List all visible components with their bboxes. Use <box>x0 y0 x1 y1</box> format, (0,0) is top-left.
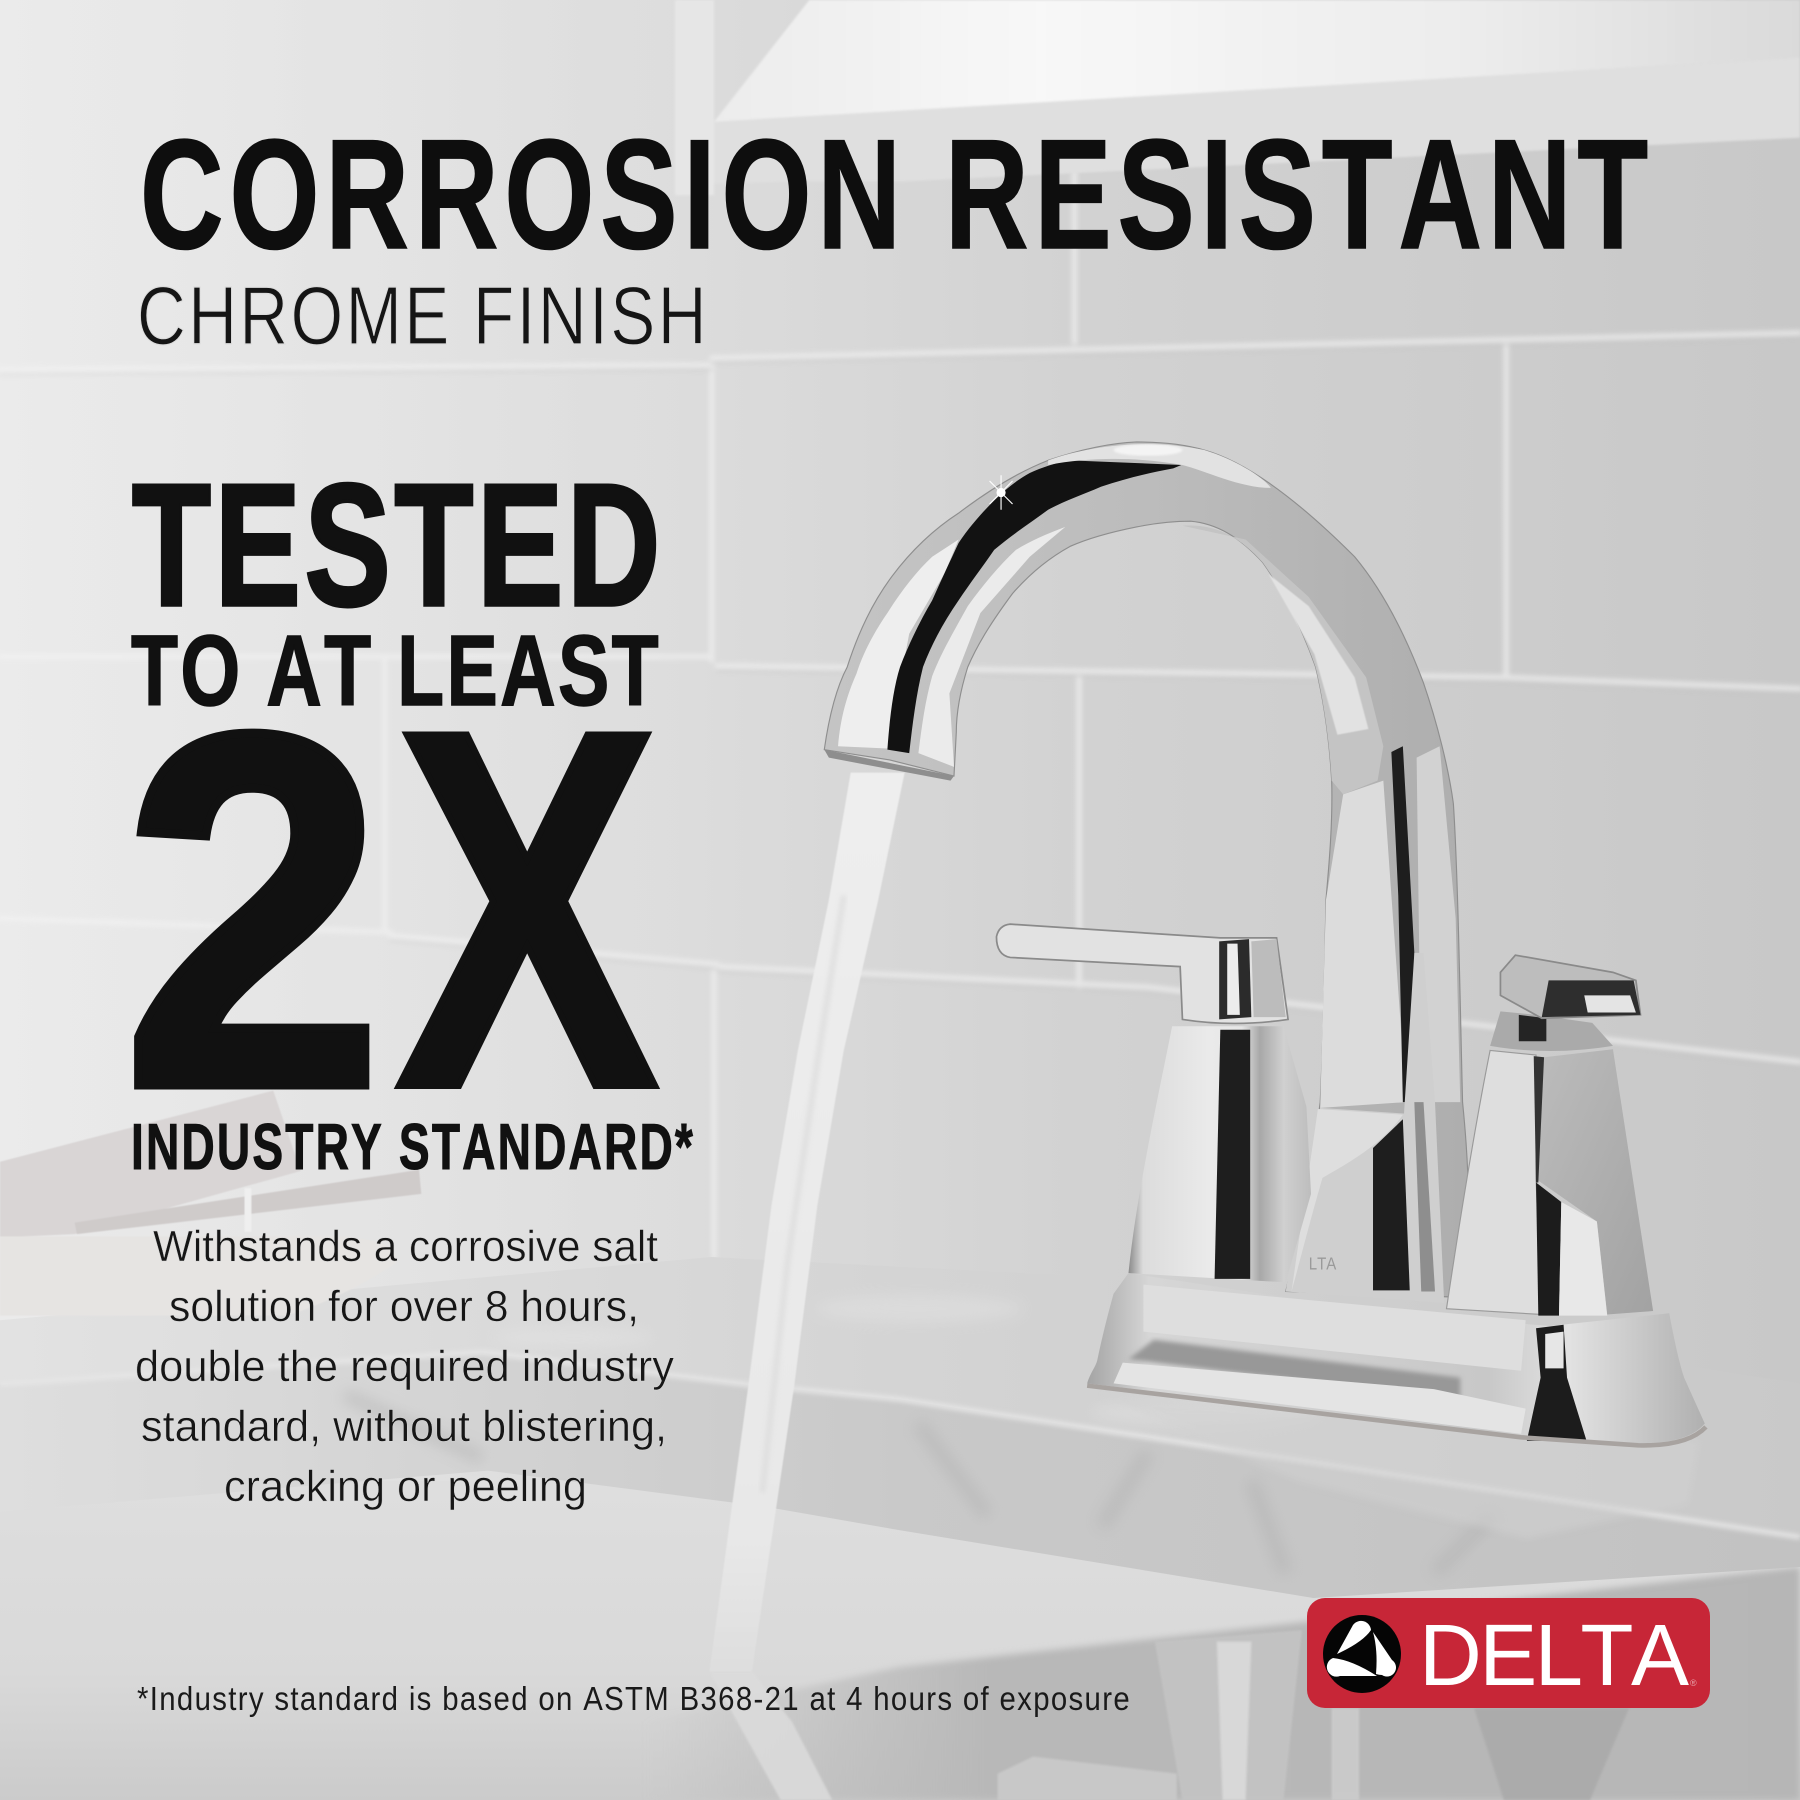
faucet reflection on counter <box>1102 1395 1699 1538</box>
spout base column <box>1286 953 1444 1303</box>
body copy: double the required industry <box>135 1342 674 1391</box>
2X: X: X <box>396 625 660 1193</box>
deck plate <box>1087 1273 1706 1445</box>
left cross handle <box>996 924 1311 1282</box>
faucet <box>824 442 1706 1445</box>
tested: TESTED <box>132 447 664 642</box>
logo: Delta <box>1307 1598 1710 1708</box>
icon: Delta triangle mark <box>1323 1615 1401 1693</box>
logo: Delta: ® <box>1690 1678 1697 1688</box>
claim block: tested to at least 2X industry standard <box>122 447 695 1193</box>
body copy <box>135 1222 674 1511</box>
sink basin <box>0 1481 1800 1800</box>
spout base column: LTA <box>1309 1254 1337 1274</box>
marble countertop <box>0 1257 1800 1598</box>
2X: two: 2 <box>122 629 384 1192</box>
body copy: cracking or peeling <box>224 1462 587 1511</box>
industry standard: INDUSTRY STANDARD* <box>131 1110 695 1183</box>
spout <box>824 442 1468 1297</box>
to at least: TO AT LEAST <box>131 615 661 727</box>
body copy: standard, without blistering, <box>141 1402 667 1451</box>
body copy: Withstands a corrosive salt <box>153 1222 658 1271</box>
ceiling ledge <box>675 0 1800 195</box>
body copy: solution for over 8 hours, <box>169 1282 639 1331</box>
wordmark: DELTA <box>1419 1607 1689 1704</box>
subheading: chrome finish: CHROME FINISH <box>137 269 709 362</box>
footnote: *Industry standard is based on ASTM B368-21 at 4 hours of exposure <box>137 1680 1131 1717</box>
faucet reflection in basin <box>998 1630 1629 1800</box>
water stream <box>709 773 905 1800</box>
right cross handle <box>1446 955 1653 1316</box>
soap dish and bar <box>0 1091 421 1316</box>
